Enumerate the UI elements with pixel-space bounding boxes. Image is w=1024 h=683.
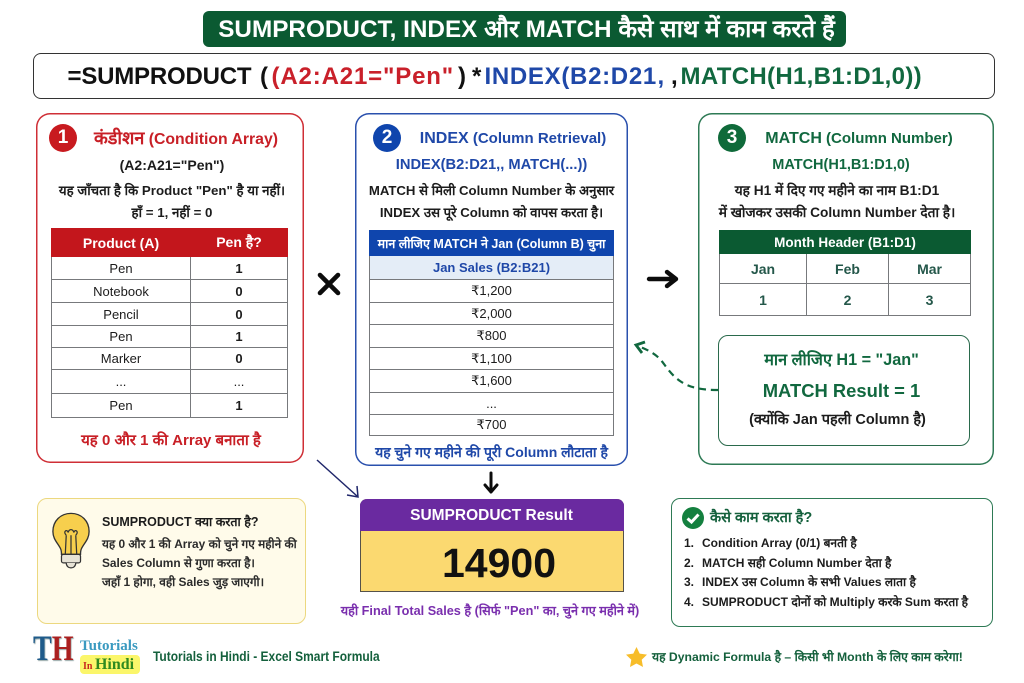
multiply sign xyxy=(318,272,340,296)
panel 1 heading: कंडीशन (Condition Array) xyxy=(94,128,278,148)
tip body: Sales Column से गुणा करता है। xyxy=(102,556,255,570)
reason text: (क्योंकि Jan पहली Column है) xyxy=(749,412,926,428)
steps list: 1. xyxy=(684,536,694,550)
result caption: यही Final Total Sales है (सिर्फ "Pen" का, चुने गए महीने में) xyxy=(341,604,639,618)
panel: index xyxy=(355,113,628,466)
condition table: Pen है? xyxy=(216,234,262,250)
icon: check xyxy=(682,507,704,529)
condition table: Pen xyxy=(109,329,133,344)
panel 1 formula: (A2:A21="Pen") xyxy=(120,157,224,173)
formula bar: ( xyxy=(260,63,268,90)
result value: 14900 xyxy=(442,540,556,586)
arrow: condition to result xyxy=(316,460,359,498)
formula bar: INDEX(B2:D21 xyxy=(484,63,657,90)
condition table: 0 xyxy=(235,284,243,298)
condition table: Pen xyxy=(109,398,133,413)
panel: condition array xyxy=(36,113,304,463)
formula bar: , xyxy=(658,63,664,90)
dashed arrow: match result to index xyxy=(634,340,718,392)
steps list: 2. xyxy=(684,556,694,570)
condition table: ... xyxy=(234,374,244,389)
panel 2 heading: INDEX (Column Retrieval) xyxy=(420,130,606,147)
condition table: Pencil xyxy=(103,306,139,322)
jan sales table xyxy=(369,230,614,436)
formula bar xyxy=(33,53,995,99)
panel 2 description: MATCH से मिली Column Number के अनुसार xyxy=(369,183,614,198)
panel 1 description xyxy=(58,182,285,220)
logo xyxy=(33,628,140,674)
arrow: index to result xyxy=(483,472,499,494)
match result text: MATCH Result = 1 xyxy=(763,380,920,401)
result header xyxy=(360,499,624,531)
jan sales table: Jan Sales (B2:B21) xyxy=(433,260,550,275)
condition table xyxy=(51,228,288,418)
steps list xyxy=(684,536,968,609)
condition table: 1 xyxy=(235,329,243,344)
icon: star xyxy=(626,647,647,667)
logo letters: TH xyxy=(33,628,74,668)
assumption text: मान लीजिए H1 = "Jan" xyxy=(764,351,919,369)
step 1 badge: 1 xyxy=(58,127,68,148)
panel 1 caption: यह 0 और 1 की Array बनाता है xyxy=(81,432,261,449)
steps list: SUMPRODUCT दोनों को Multiply करके Sum करता है xyxy=(702,595,968,609)
step 3 badge xyxy=(718,124,746,152)
footer right text: यह Dynamic Formula है – किसी भी Month के लिए काम करेगा! xyxy=(652,650,963,664)
panel: match xyxy=(698,113,994,465)
steps list: 4. xyxy=(684,595,694,609)
tip body: यह 0 और 1 की Array को चुने गए महीने की xyxy=(102,537,297,551)
panel 2 description: INDEX उस पूरे Column को वापस करता है। xyxy=(380,205,603,220)
condition table: 0 xyxy=(235,351,243,366)
icon: light bulb xyxy=(52,512,90,568)
condition table: Notebook xyxy=(93,284,149,298)
steps list: Condition Array (0/1) बनती है xyxy=(702,536,857,550)
step 3 badge: 3 xyxy=(727,127,737,148)
panel 2 description xyxy=(369,182,615,221)
formula bar: (A2:A21="Pen" xyxy=(272,63,454,90)
title: SUMPRODUCT, INDEX और MATCH कैसे साथ में काम करते हैं xyxy=(218,16,835,43)
formula bar: ) xyxy=(458,63,466,90)
how heading: कैसे काम करता है? xyxy=(710,510,812,526)
step 2 badge xyxy=(373,124,401,152)
formula bar: , xyxy=(671,63,678,90)
jan sales table: ₹800 xyxy=(477,328,506,343)
panel 2 caption: यह चुने गए महीने की पूरी Column लौटाता है xyxy=(375,444,608,460)
step 2 badge: 2 xyxy=(382,127,392,148)
formula bar: MATCH(H1,B1:D1,0)) xyxy=(680,63,922,90)
jan sales table: मान लीजिए MATCH ने Jan (Column B) चुना xyxy=(378,236,605,250)
arrow: index to match xyxy=(646,270,678,288)
panel: sumproduct result xyxy=(360,499,624,592)
jan sales table: ₹2,000 xyxy=(471,306,512,320)
footer left text: Tutorials in Hindi - Excel Smart Formula xyxy=(153,649,380,664)
steps list: INDEX उस Column के सभी Values लाता है xyxy=(702,575,916,589)
formula bar: =SUMPRODUCT xyxy=(68,63,251,90)
formula bar: * xyxy=(472,63,481,90)
jan sales table: ₹700 xyxy=(477,417,506,432)
condition table: Pen xyxy=(109,260,133,276)
tip body xyxy=(102,537,298,590)
step 1 badge xyxy=(49,124,77,152)
month table: Feb xyxy=(835,260,860,276)
jan sales table: ₹1,100 xyxy=(471,350,512,366)
month table: 2 xyxy=(844,292,851,308)
month table: 3 xyxy=(926,292,933,308)
panel 2 formula: INDEX(B2:D21,, MATCH(...)) xyxy=(396,157,587,173)
panel 3 description: में खोजकर उसकी Column Number देता है। xyxy=(719,205,955,220)
result header: SUMPRODUCT Result xyxy=(410,507,573,524)
condition table: 1 xyxy=(235,260,243,276)
month table: Jan xyxy=(751,260,775,276)
panel: sumproduct tip xyxy=(37,498,306,624)
steps list: 3. xyxy=(684,575,694,589)
month table xyxy=(719,230,971,316)
panel 1 description: यह जाँचता है कि Product "Pen" है या नहीं। xyxy=(59,183,285,198)
condition table: 1 xyxy=(235,398,243,413)
tip heading: SUMPRODUCT क्या करता है? xyxy=(102,515,259,529)
panel 3 formula: MATCH(H1,B1:D1,0) xyxy=(772,157,910,173)
condition table: ... xyxy=(116,374,126,389)
month table: 1 xyxy=(759,292,767,308)
jan sales table: ₹1,200 xyxy=(471,283,512,298)
jan sales table: ... xyxy=(486,396,497,411)
condition table: 0 xyxy=(235,306,243,322)
tip body: जहाँ 1 होगा, वही Sales जुड़ जाएगी। xyxy=(102,575,264,589)
jan sales table: ₹1,600 xyxy=(471,373,512,388)
month table: Mar xyxy=(917,260,942,276)
condition table: Product (A) xyxy=(83,234,159,250)
month table: Month Header (B1:D1) xyxy=(774,234,916,250)
logo word hindi: In Hindi xyxy=(83,656,134,673)
condition table: Marker xyxy=(101,351,141,366)
panel: how it works xyxy=(671,498,993,627)
logo word tutorials: Tutorials xyxy=(80,638,138,654)
panel 1 description: हाँ = 1, नहीं = 0 xyxy=(132,205,212,220)
panel 3 description: यह H1 में दिए गए महीने का नाम B1:D1 xyxy=(735,183,939,198)
steps list: MATCH सही Column Number देता है xyxy=(702,556,891,570)
panel 3 description xyxy=(718,182,955,220)
panel 3 heading: MATCH (Column Number) xyxy=(765,130,953,147)
match result box xyxy=(718,335,970,446)
